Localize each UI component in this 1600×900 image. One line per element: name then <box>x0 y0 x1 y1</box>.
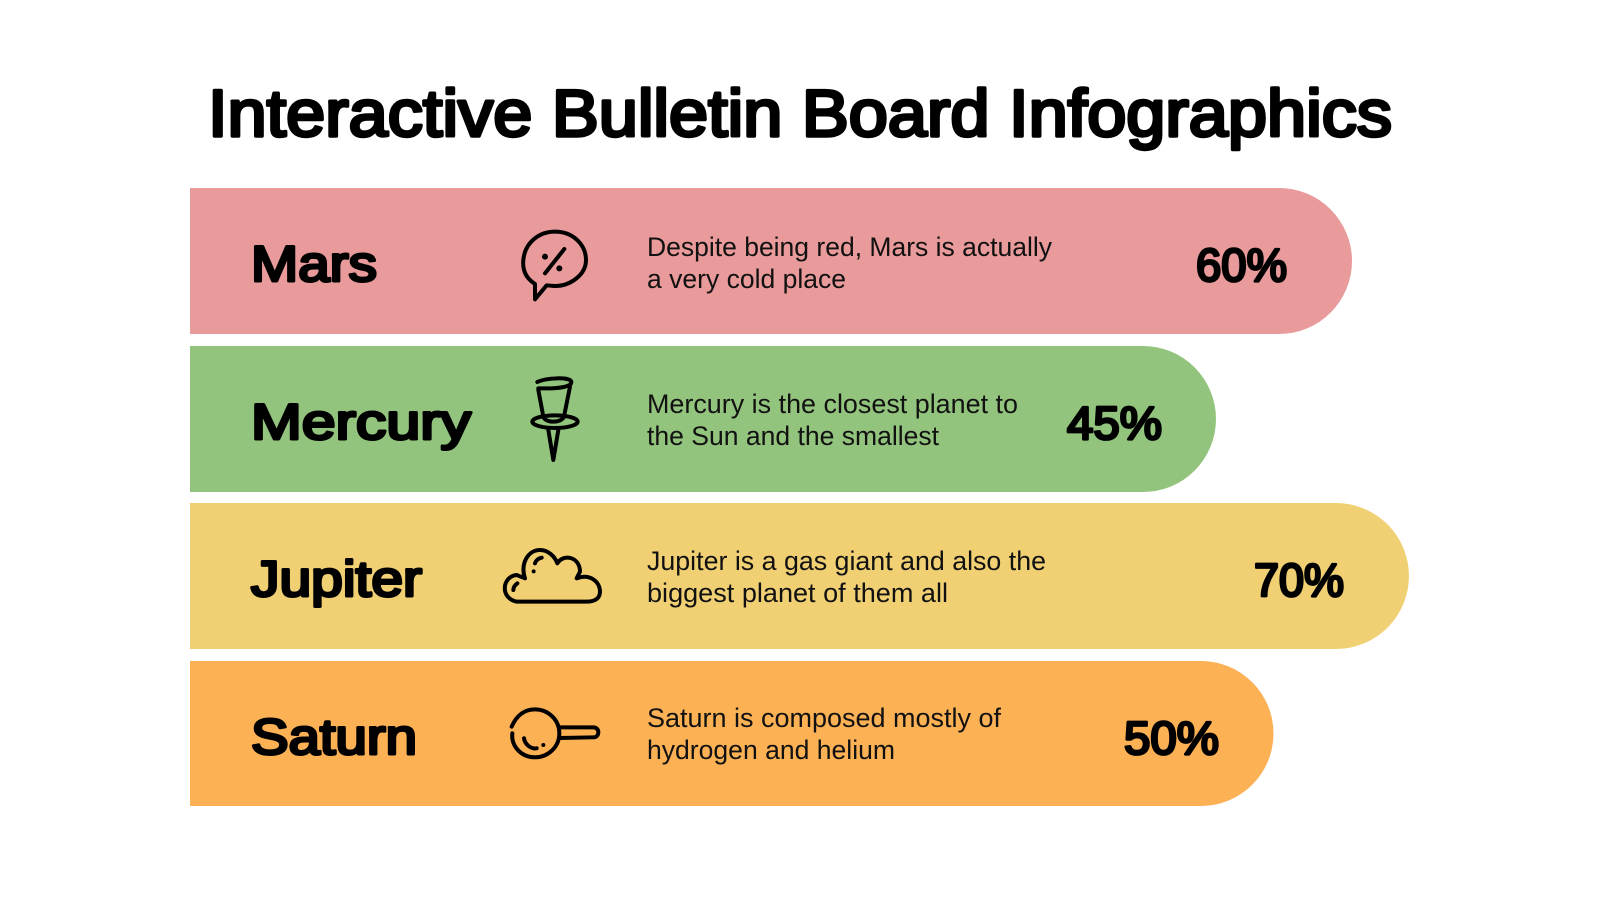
bar: Jupiter <box>190 503 1409 649</box>
description: Mars: a very cold place <box>647 264 846 294</box>
description: Saturn <box>647 703 1002 765</box>
icon: planet with handle <box>512 709 598 757</box>
description: Mercury: the Sun and the smallest <box>647 421 940 451</box>
label: Saturn: Saturn <box>251 709 417 765</box>
description: Mars: Despite being red, Mars is actually <box>647 232 1053 262</box>
icon: speech bubble with percent <box>523 232 586 299</box>
panel: Jupiter <box>190 503 1409 649</box>
bar: Mars <box>190 188 1352 334</box>
label: Mercury: Mercury <box>251 394 471 450</box>
description: Mars <box>647 232 1053 294</box>
description: Saturn: Saturn is composed mostly of <box>647 703 1002 733</box>
label: Mars: Mars <box>251 236 377 292</box>
description: Saturn: hydrogen and helium <box>647 735 895 765</box>
bar: Mercury <box>190 346 1216 492</box>
value: Saturn: 50% <box>1124 712 1219 764</box>
description: Mercury <box>647 389 1018 451</box>
description: Jupiter <box>647 546 1046 608</box>
value: Mars: 60% <box>1196 239 1287 291</box>
panel: Saturn <box>190 661 1274 806</box>
value: Jupiter: 70% <box>1254 554 1344 606</box>
icon: push pin <box>532 378 578 460</box>
description: Mercury: Mercury is the closest planet to <box>647 389 1018 419</box>
description: Jupiter: biggest planet of them all <box>647 578 948 608</box>
panel: Mars <box>190 188 1352 334</box>
description: Jupiter: Jupiter is a gas giant and also the <box>647 546 1046 576</box>
icon: cloud <box>505 550 600 602</box>
bar: Saturn <box>190 661 1274 806</box>
value: Mercury: 45% <box>1067 397 1162 449</box>
panel: Mercury <box>190 346 1216 492</box>
label: Jupiter: Jupiter <box>251 551 422 607</box>
title: Interactive Bulletin Board Infographics <box>208 76 1392 150</box>
